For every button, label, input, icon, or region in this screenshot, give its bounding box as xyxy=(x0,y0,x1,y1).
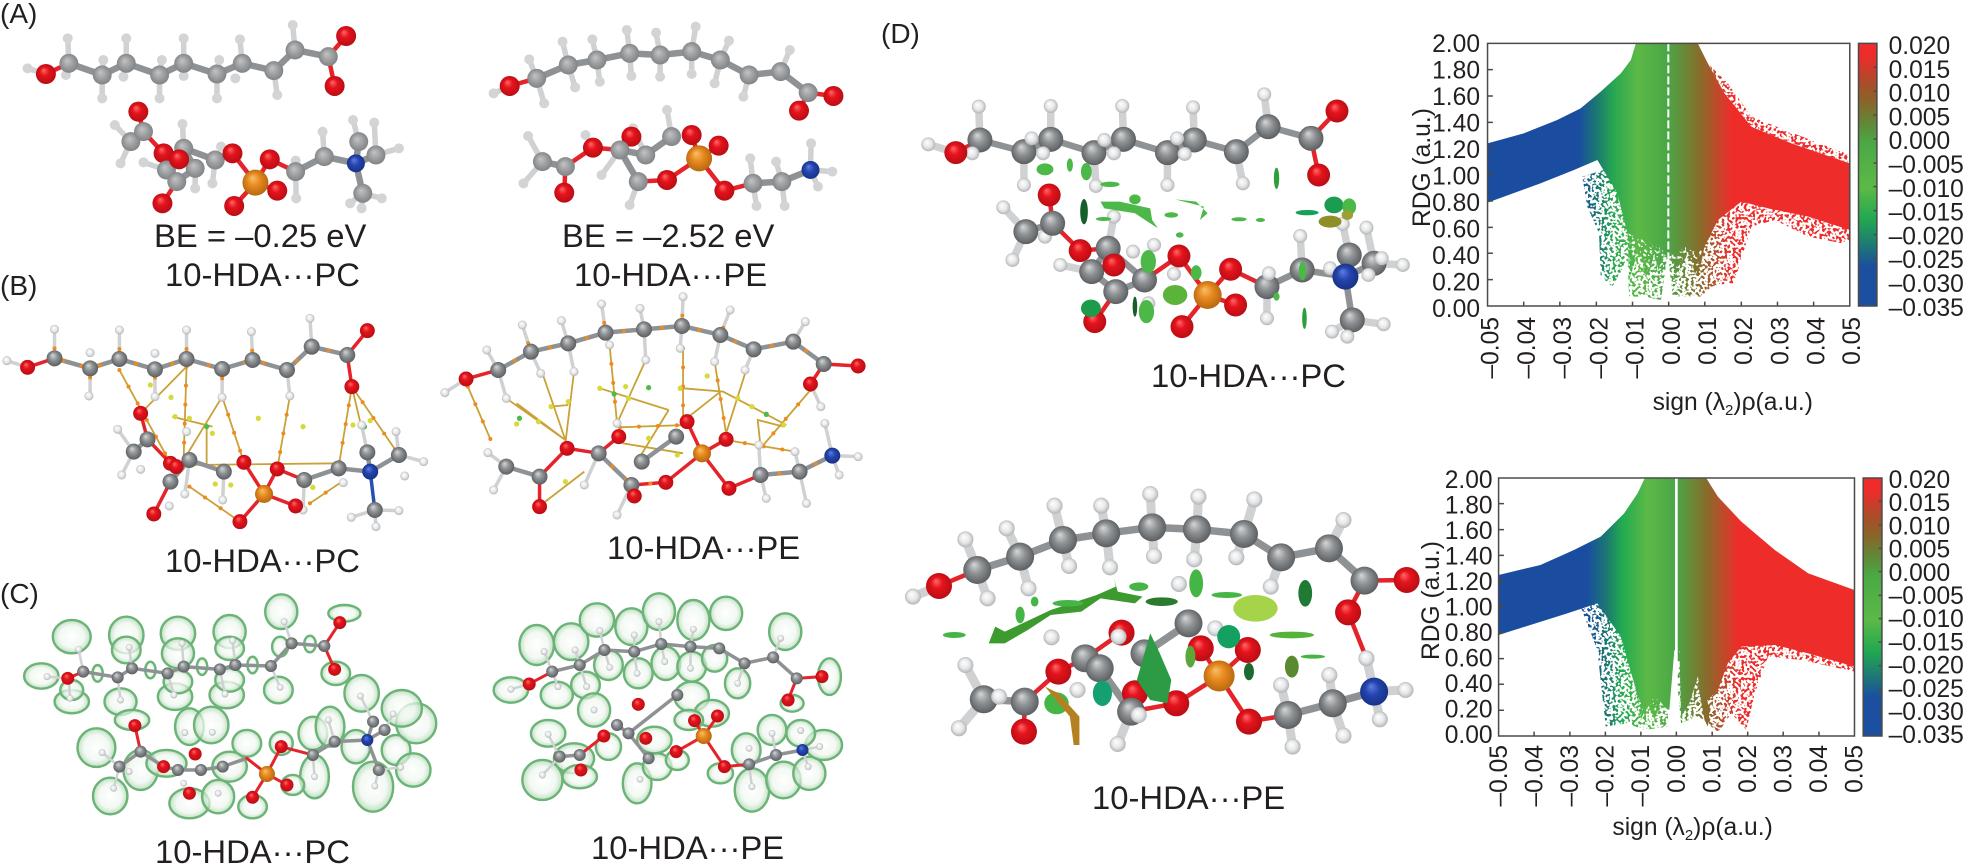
colour bar labels: 0.010 xyxy=(1889,81,1950,108)
x axis labels: 0.00 xyxy=(1659,317,1686,365)
binding energy PE: BE = –2.52 eV xyxy=(562,217,775,254)
colour bar xyxy=(1858,43,1877,306)
x axis labels: 0.02 xyxy=(1735,745,1762,793)
x axis labels: –0.03 xyxy=(1557,745,1584,807)
panel label B: (B) xyxy=(0,270,37,301)
name PC: 10-HDA···PC xyxy=(1151,357,1346,394)
x axis labels: –0.05 xyxy=(1486,745,1513,807)
colour bar labels: –0.025 xyxy=(1889,247,1964,274)
colour bar labels: –0.015 xyxy=(1889,629,1964,656)
colour bar labels: –0.010 xyxy=(1889,176,1964,203)
colour bar labels: 0.000 xyxy=(1889,128,1950,155)
colour bar labels xyxy=(1889,467,1964,749)
y axis labels: 1.20 xyxy=(1445,569,1493,596)
molecule with lobes: PC xyxy=(24,594,436,818)
name PE: 10-HDA···PE xyxy=(591,829,784,866)
colour bar labels: –0.010 xyxy=(1889,606,1964,633)
x axis labels: –0.05 xyxy=(1478,317,1505,379)
y axis labels xyxy=(1432,31,1480,323)
x axis title: 2 xyxy=(1685,827,1693,844)
x axis labels: 0.01 xyxy=(1699,745,1726,793)
x axis title: )ρ(a.u.) xyxy=(1693,814,1773,841)
colour bar labels: –0.035 xyxy=(1889,295,1964,322)
colour bar labels: 0.010 xyxy=(1889,513,1950,540)
x axis labels: 0.03 xyxy=(1770,745,1797,793)
y axis labels: 0.80 xyxy=(1445,620,1493,647)
x axis labels: 0.05 xyxy=(1842,745,1868,793)
name PC: 10-HDA···PC xyxy=(165,542,360,579)
name PE: 10-HDA···PE xyxy=(607,529,800,566)
panel D: non-covalent interaction analysis xyxy=(881,18,1964,844)
binding energy PC: BE = –0.25 eV xyxy=(154,217,367,254)
molecule with bond paths: PE xyxy=(440,292,866,519)
x axis title: sign (λ xyxy=(1612,814,1685,841)
y axis labels: 0.80 xyxy=(1432,190,1480,217)
name PE: 10-HDA···PE xyxy=(1092,779,1285,816)
colour bar labels: 0.020 xyxy=(1889,467,1950,494)
y axis labels: 0.40 xyxy=(1445,671,1493,698)
colour bar labels xyxy=(1889,33,1964,322)
x axis labels: 0.05 xyxy=(1839,317,1866,365)
y axis labels: 0.20 xyxy=(1432,270,1480,296)
colour bar labels: –0.020 xyxy=(1889,653,1964,680)
x axis title: sign (λ xyxy=(1653,389,1725,416)
colour bar labels: 0.000 xyxy=(1889,560,1950,587)
y axis labels: 1.40 xyxy=(1432,110,1480,138)
x axis labels: –0.01 xyxy=(1628,745,1655,807)
molecule with bond paths: PC xyxy=(2,314,428,531)
RDG scatter chart: PE xyxy=(1418,467,1964,844)
name PC: 10-HDA···PC xyxy=(165,256,360,293)
panel B: bond critical paths xyxy=(0,270,866,579)
colour bar labels: 0.005 xyxy=(1889,104,1950,131)
y axis labels: 1.80 xyxy=(1445,492,1493,520)
x axis title: 2 xyxy=(1725,402,1733,419)
y axis labels: 1.00 xyxy=(1432,164,1480,190)
y axis labels: 0.00 xyxy=(1432,296,1480,323)
y axis labels: 0.20 xyxy=(1445,696,1493,724)
molecule with NCI surfaces: PE xyxy=(905,486,1420,755)
molecule: 10-HDA and PC xyxy=(23,20,404,216)
colour bar xyxy=(1863,478,1882,736)
scatter plot area xyxy=(1499,478,1854,736)
molecule: 10-HDA and PE xyxy=(489,22,843,211)
RDG scatter chart: PC xyxy=(1409,31,1964,419)
x axis labels: 0.04 xyxy=(1806,745,1833,793)
panel C: electron localisation lobes xyxy=(0,578,842,866)
panel label C: (C) xyxy=(0,578,39,609)
y axis labels: 2.00 xyxy=(1432,31,1480,58)
y axis title: RDG (a.u.) xyxy=(1418,541,1445,660)
y axis labels: 0.40 xyxy=(1432,243,1480,270)
x axis labels: 0.04 xyxy=(1804,317,1831,365)
colour bar labels: 0.020 xyxy=(1889,33,1950,60)
panel A: binding energy structures xyxy=(0,0,843,293)
NCI isosurfaces xyxy=(943,569,1325,745)
x axis title: )ρ(a.u.) xyxy=(1733,389,1813,416)
y axis labels: 1.60 xyxy=(1432,84,1480,111)
y axis labels: 1.60 xyxy=(1445,518,1493,545)
name PE: 10-HDA···PE xyxy=(574,256,767,293)
y axis labels: 0.60 xyxy=(1432,216,1480,244)
colour bar labels: –0.025 xyxy=(1889,676,1964,703)
colour bar labels: –0.005 xyxy=(1889,583,1964,610)
molecule with NCI surfaces: PC xyxy=(921,87,1410,344)
y axis labels: 2.00 xyxy=(1445,467,1493,494)
y axis labels: 1.80 xyxy=(1432,58,1480,84)
colour bar labels: 0.015 xyxy=(1889,57,1950,84)
y axis labels xyxy=(1445,467,1493,749)
x axis labels: –0.04 xyxy=(1522,745,1549,807)
molecule with lobes: PE xyxy=(494,593,842,812)
colour bar labels: –0.030 xyxy=(1889,271,1964,298)
x axis labels xyxy=(1478,317,1866,379)
y axis labels: 0.60 xyxy=(1445,646,1493,672)
x axis labels: –0.04 xyxy=(1514,317,1541,379)
y axis labels: 1.00 xyxy=(1445,594,1493,622)
x axis labels: –0.02 xyxy=(1593,745,1620,807)
NCI isosurfaces xyxy=(1037,158,1356,329)
colour bar labels: –0.030 xyxy=(1889,699,1964,726)
colour bar labels: 0.015 xyxy=(1889,490,1950,517)
x axis labels: 0.03 xyxy=(1768,317,1794,365)
colour bar labels: –0.005 xyxy=(1889,152,1964,179)
panel label D: (D) xyxy=(881,18,920,49)
y axis labels: 1.40 xyxy=(1445,544,1493,570)
colour bar labels: –0.035 xyxy=(1889,722,1964,749)
scatter plot area xyxy=(1488,43,1850,306)
colour bar labels: –0.015 xyxy=(1889,200,1964,227)
x axis labels: 0.00 xyxy=(1664,745,1691,793)
x axis labels: –0.03 xyxy=(1550,317,1577,379)
colour bar labels: –0.020 xyxy=(1889,223,1964,250)
y axis title: RDG (a.u.) xyxy=(1409,108,1436,227)
x axis labels: 0.01 xyxy=(1695,317,1722,365)
x axis labels: –0.02 xyxy=(1586,317,1613,379)
x axis labels xyxy=(1486,745,1868,807)
x axis labels: 0.02 xyxy=(1731,317,1758,365)
colour bar labels: 0.005 xyxy=(1889,537,1950,564)
x axis labels: –0.01 xyxy=(1622,317,1650,379)
y axis labels: 1.20 xyxy=(1432,137,1480,164)
y axis labels: 0.00 xyxy=(1445,722,1493,749)
